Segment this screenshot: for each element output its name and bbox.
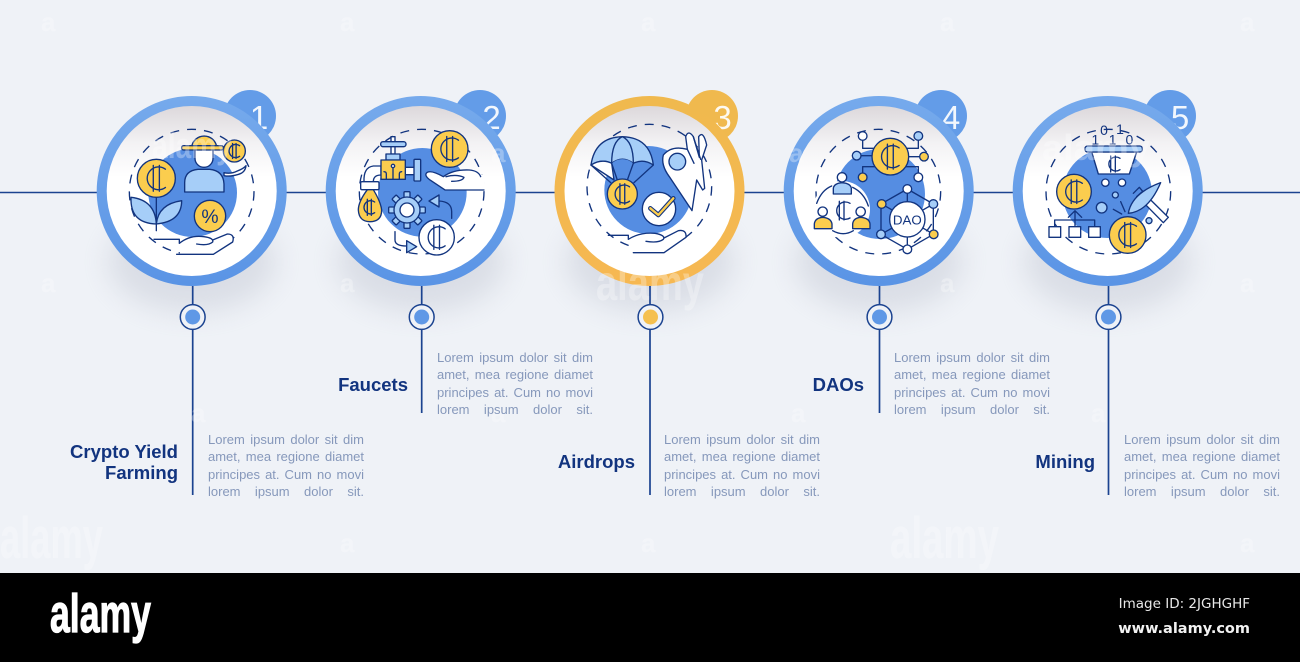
text block 5: principes at. Cum no movi — [1124, 467, 1280, 482]
text block 1: lorem ipsum dolor sit. — [208, 484, 364, 499]
title 3: Airdrops — [558, 451, 635, 472]
text block 3 — [664, 432, 820, 499]
icon: mining: 1 — [1116, 121, 1124, 137]
number badge 4: 4 — [942, 99, 960, 136]
node 2 — [409, 305, 434, 329]
watermarks: a — [41, 268, 56, 298]
step 1 graphic — [97, 90, 287, 495]
number badge 3: 3 — [713, 99, 732, 136]
icon: crypto yield farming: % — [201, 207, 219, 228]
node 5 — [1096, 305, 1121, 329]
connector 4 — [878, 286, 880, 413]
text block 2: amet, mea regione diamet — [437, 367, 593, 382]
icon: mining — [1046, 121, 1171, 254]
icon: mining: 0 — [1125, 131, 1133, 147]
text block 3: lorem ipsum dolor sit. — [664, 484, 820, 499]
text block 5: amet, mea regione diamet — [1124, 449, 1280, 464]
text block 2: Lorem ipsum dolor sit dim — [437, 350, 593, 365]
number badge 1 — [224, 90, 276, 142]
image id: Image ID: 2JGHGHF — [1119, 596, 1250, 612]
connector 2 — [421, 286, 423, 413]
connector 5 — [1108, 286, 1110, 495]
watermarks: a — [1240, 268, 1255, 298]
icon: mining: 0 — [1100, 122, 1108, 138]
alamy logo: alamy — [50, 584, 151, 644]
number badge 2 — [454, 90, 506, 142]
horizontal timeline — [0, 192, 1300, 194]
watermarks: a — [641, 528, 656, 558]
title 1 — [70, 441, 178, 483]
connector 1 — [192, 286, 194, 495]
watermarks: a — [41, 7, 56, 37]
step 3 graphic — [554, 90, 744, 495]
icon: mining: 1 — [1091, 131, 1099, 147]
text block 5: lorem ipsum dolor sit. — [1124, 484, 1280, 499]
text block 1: amet, mea regione diamet — [208, 449, 364, 464]
watermarks: a — [1240, 7, 1255, 37]
number badge 4 — [915, 90, 967, 142]
watermarks: a — [940, 7, 955, 37]
text block 4: Lorem ipsum dolor sit dim — [894, 350, 1050, 365]
watermarks: a — [789, 138, 804, 168]
title 2: Faucets — [338, 374, 408, 395]
step 4 graphic — [784, 90, 974, 413]
text block 5 — [1124, 432, 1280, 499]
watermarks: a — [191, 398, 206, 428]
number badge 2: 2 — [482, 99, 501, 136]
text block 4: lorem ipsum dolor sit. — [894, 402, 1050, 417]
ring 4 — [784, 96, 974, 286]
text block 4: amet, mea regione diamet — [894, 367, 1050, 382]
connector 3 — [649, 286, 651, 495]
watermarks: a — [641, 7, 656, 37]
watermarks: alamy — [0, 506, 103, 571]
watermarks: a — [1240, 528, 1255, 558]
node 3 — [638, 305, 663, 329]
watermarks: alamy — [890, 506, 999, 571]
text block 3: Lorem ipsum dolor sit dim — [664, 432, 820, 447]
watermarks: alamy — [1042, 127, 1150, 168]
watermarks: alamy — [596, 255, 704, 311]
watermarks: a — [1091, 398, 1106, 428]
text block 1 — [208, 432, 364, 499]
step 5 graphic — [1013, 90, 1203, 495]
text block 4 — [894, 350, 1050, 417]
title 1: Farming — [105, 462, 178, 483]
icon: crypto yield farming — [129, 129, 254, 254]
text block 3: principes at. Cum no movi — [664, 467, 820, 482]
text block 1: Lorem ipsum dolor sit dim — [208, 432, 364, 447]
number badge 5: 5 — [1171, 99, 1189, 136]
number badge 1: 1 — [250, 99, 268, 136]
text block 2 — [437, 350, 593, 417]
watermarks: a — [491, 398, 506, 428]
watermarks: a — [340, 268, 355, 298]
text block 5: Lorem ipsum dolor sit dim — [1124, 432, 1280, 447]
number badge 5 — [1144, 90, 1196, 142]
watermarks: a — [340, 7, 355, 37]
footer bar — [0, 573, 1300, 662]
title 5: Mining — [1035, 451, 1095, 472]
text block 1: principes at. Cum no movi — [208, 467, 364, 482]
ring 3 — [554, 96, 744, 286]
watermarks: a — [491, 138, 506, 168]
node 1 — [180, 305, 205, 329]
title 4: DAOs — [813, 374, 864, 395]
icon: DAOs: DAO — [893, 212, 922, 227]
icon: airdrops — [587, 124, 712, 253]
watermarks: alamy — [152, 125, 232, 166]
icon: mining: 1 — [1109, 131, 1117, 147]
watermarks: a — [791, 398, 806, 428]
watermarks: a — [340, 528, 355, 558]
text block 2: principes at. Cum no movi — [437, 385, 593, 400]
text block 2: lorem ipsum dolor sit. — [437, 402, 593, 417]
title 1: Crypto Yield — [70, 441, 178, 462]
ring 1 — [97, 96, 287, 286]
text block 4: principes at. Cum no movi — [894, 385, 1050, 400]
ring 5 — [1013, 96, 1203, 286]
icon: DAOs — [813, 129, 941, 254]
text block 3: amet, mea regione diamet — [664, 449, 820, 464]
icon: faucets — [358, 129, 484, 255]
ring 2 — [326, 96, 516, 286]
website: www.alamy.com — [1118, 621, 1250, 637]
watermarks: a — [940, 268, 955, 298]
node 4 — [867, 305, 892, 329]
step 2 graphic — [326, 90, 516, 413]
number badge 3 — [686, 90, 738, 142]
